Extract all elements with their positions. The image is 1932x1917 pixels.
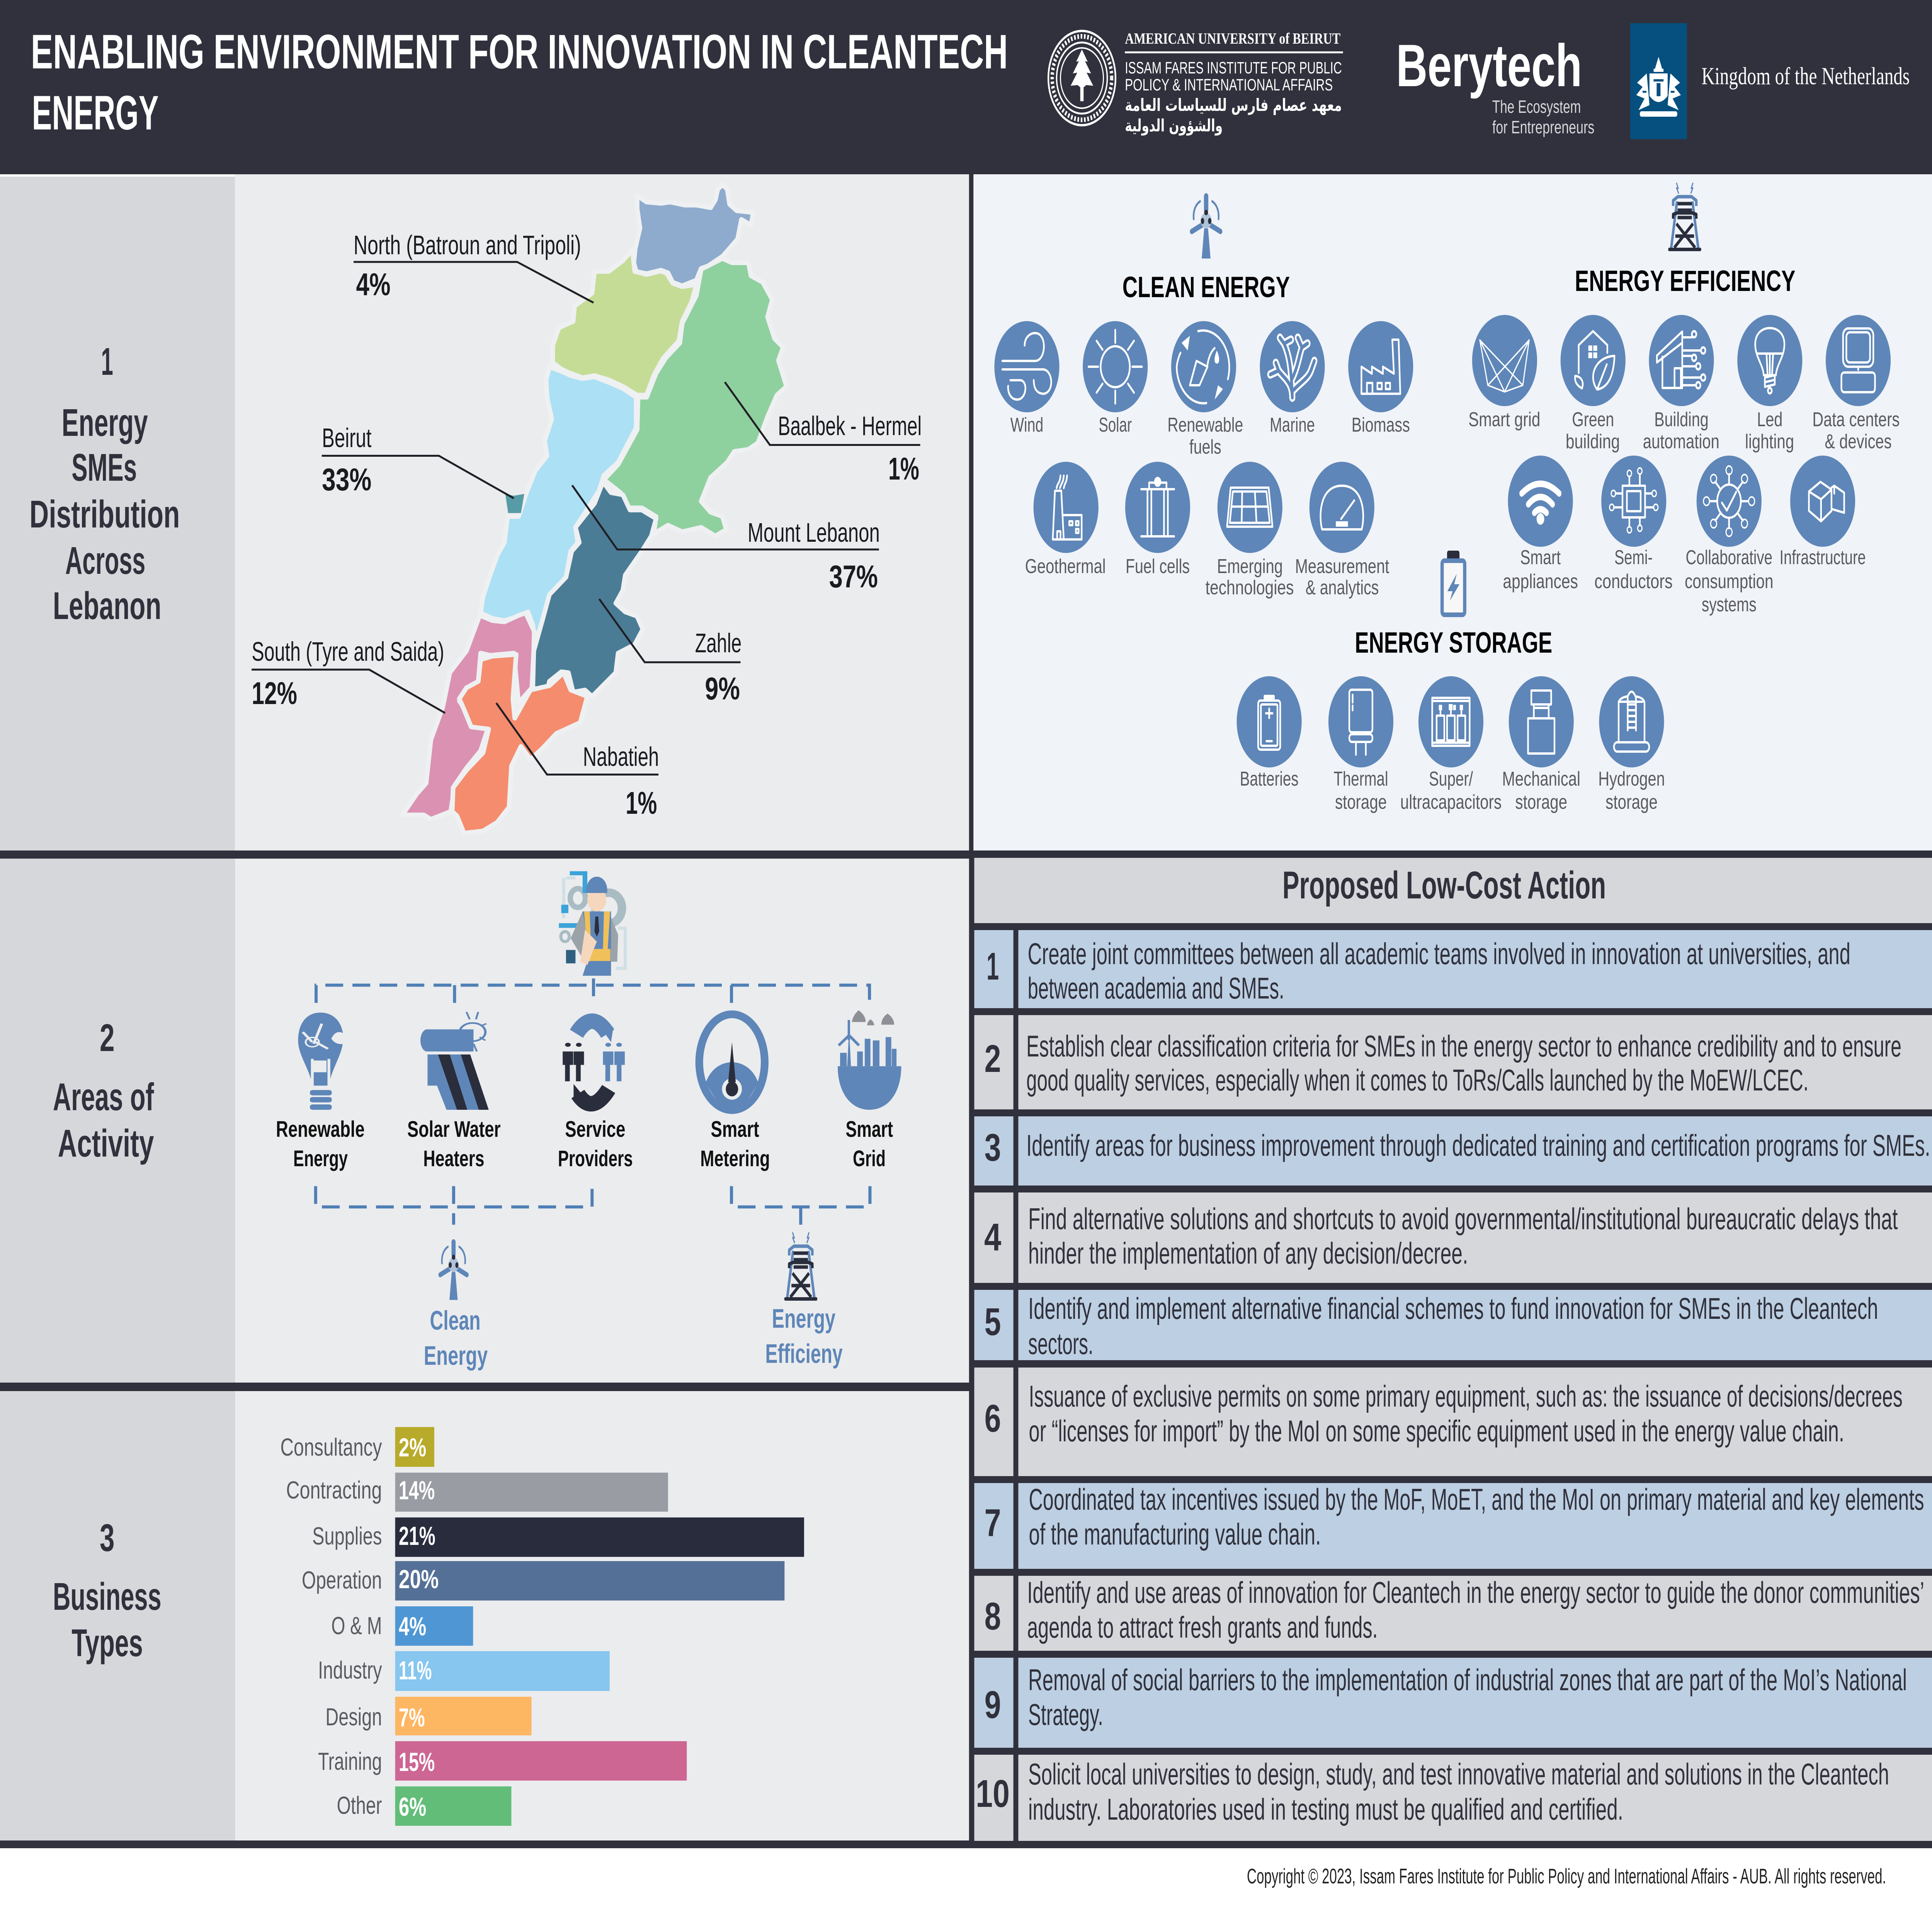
bar chart: O & M xyxy=(331,1612,382,1640)
panel: section 3 business types xyxy=(0,1391,969,1840)
heading: section 1 xyxy=(29,340,180,628)
activity labels: Solar Water xyxy=(407,1116,501,1142)
icon: wind: Wind xyxy=(1010,413,1043,436)
icon: building automation: automation xyxy=(1643,430,1719,453)
action 7: of the manufacturing value chain. xyxy=(1029,1517,1321,1551)
icon: smart appliances xyxy=(1503,456,1578,593)
map labels: 4% xyxy=(356,267,391,302)
icon: building automation xyxy=(1643,315,1719,453)
icon: green building: building xyxy=(1566,430,1620,453)
action 5: 5 xyxy=(985,1300,1001,1344)
action 5: Identify and implement alternative financial schemes to fund innovation for SMEs in the Cleantech xyxy=(1028,1292,1878,1325)
map labels: North (Batroun and Tripoli) xyxy=(354,230,581,260)
icon: thermal storage xyxy=(1328,676,1393,813)
bar chart: 11% xyxy=(399,1656,432,1685)
icon: emerging technologies: technologies xyxy=(1206,576,1294,599)
action 7: 7 xyxy=(985,1501,1001,1544)
icon: supercapacitors: Super/ xyxy=(1429,767,1473,790)
logo text: Issam Fares Institute: POLICY & INTERNATIONAL AFFAIRS xyxy=(1125,75,1333,94)
icon: data centers xyxy=(1812,315,1900,453)
label: energy efficiency xyxy=(765,1303,843,1369)
heading: section 1: Lebanon xyxy=(53,584,162,628)
action 8: Identify and use areas of innovation for Cleantech in the energy sector to guide the donor communities’ xyxy=(1027,1576,1924,1609)
label: clean energy: Clean xyxy=(430,1305,481,1335)
logo: Berytech: The Ecosystem xyxy=(1492,97,1581,117)
action 1: between academia and SMEs. xyxy=(1028,971,1284,1005)
activity labels: Renewable xyxy=(276,1116,365,1142)
map labels: 37% xyxy=(829,559,878,594)
icon: green building xyxy=(1561,315,1626,453)
icon: infrastructure: Infrastructure xyxy=(1780,546,1866,569)
icon: smart appliances: Smart xyxy=(1520,546,1561,569)
icon: batteries xyxy=(1237,676,1302,790)
icon: collaborative consumption: Collaborative xyxy=(1686,546,1772,569)
heading: section 3 xyxy=(53,1516,162,1665)
icon: battery xyxy=(1442,551,1465,615)
heading: section 2 xyxy=(53,1016,154,1165)
bar chart: Supplies xyxy=(312,1522,382,1550)
icon: marine xyxy=(1260,321,1325,436)
icon: mechanical storage xyxy=(1502,676,1580,813)
icon: supercapacitors: ultracapacitors xyxy=(1400,791,1502,813)
icon: supercapacitors xyxy=(1400,676,1502,813)
icon: smart meter xyxy=(699,1014,765,1110)
map labels: Zahle xyxy=(695,628,742,658)
icon: mechanical storage: Mechanical xyxy=(1502,767,1580,790)
logo: Berytech xyxy=(1396,32,1594,137)
bar chart: 20% xyxy=(399,1565,439,1594)
bar chart: Operation xyxy=(302,1566,382,1594)
icon: smart grid city xyxy=(838,1010,901,1110)
action 9: Strategy. xyxy=(1028,1698,1103,1732)
header band xyxy=(31,23,1910,139)
logo: Kingdom of the Netherlands xyxy=(1630,23,1910,139)
icon: thermal storage: storage xyxy=(1335,791,1387,813)
action 7: Coordinated tax incentives issued by the MoF, MoET, and the MoI on primary material and key elements xyxy=(1029,1483,1924,1516)
icon: clean energy turbine xyxy=(440,1239,467,1300)
icon: green building: Green xyxy=(1572,408,1614,431)
icon: renewable energy bulb xyxy=(298,1013,344,1110)
action 3: 3 xyxy=(985,1126,1001,1169)
bar chart: Industry xyxy=(318,1656,382,1684)
panel: proposed low-cost action table xyxy=(974,858,1932,1841)
action 10: Solicit local universities to design, study, and test innovative material and solutions in the Cleantech xyxy=(1028,1757,1889,1791)
activity labels: Energy xyxy=(293,1146,348,1171)
icon: service providers xyxy=(563,1021,625,1104)
heading: section 3: Business xyxy=(53,1575,162,1618)
icon: measurement and analytics: & analytics xyxy=(1306,576,1379,599)
action 3 xyxy=(974,1116,1932,1186)
action 10 xyxy=(974,1755,1932,1841)
heading: section 1: Energy xyxy=(62,401,148,444)
icon: semiconductors xyxy=(1594,456,1673,593)
action 9 xyxy=(974,1658,1932,1748)
icon: marine: Marine xyxy=(1270,413,1315,436)
action 1: Create joint committees between all academic teams involved in innovation at universities, and xyxy=(1028,937,1850,971)
icon: measurement and analytics: Measurement xyxy=(1295,555,1389,578)
heading: section 1: SMEs xyxy=(71,446,137,489)
action 2 xyxy=(974,1015,1932,1109)
icon: renewable fuels xyxy=(1167,321,1243,458)
icon: measurement and analytics xyxy=(1295,462,1389,599)
action 1: 1 xyxy=(986,945,999,988)
heading: section 1: Distribution xyxy=(29,493,180,536)
activity labels: Metering xyxy=(700,1146,770,1171)
activity labels xyxy=(276,1116,893,1171)
title: ENABLING ENVIRONMENT FOR INNOVATION IN CLEANTECH xyxy=(31,25,1008,78)
logo text: Issam Fares Institute: ISSAM FARES INSTITUTE FOR PUBLIC xyxy=(1125,58,1342,77)
label: energy efficiency: Energy xyxy=(772,1303,835,1334)
icon: emerging technologies xyxy=(1206,462,1294,599)
action 6: or “licenses for import” by the MoI on some specific equipment used in the energy value chain. xyxy=(1029,1414,1844,1448)
icon: semiconductors: Semi- xyxy=(1614,546,1653,569)
activity labels: Grid xyxy=(853,1146,886,1171)
icon: collaborative consumption: consumption xyxy=(1685,570,1774,593)
bar chart: 4% xyxy=(399,1612,426,1641)
icon: data centers: Data centers xyxy=(1812,408,1900,431)
heading: section 2: Areas of xyxy=(53,1075,154,1119)
logo: AUB emblem xyxy=(1048,31,1116,125)
icon: hydrogen storage: Hydrogen xyxy=(1598,767,1665,790)
heading: energy efficiency: ENERGY EFFICIENCY xyxy=(1575,264,1796,297)
icon: wind xyxy=(994,321,1060,436)
icon: geothermal: Geothermal xyxy=(1025,555,1106,578)
map labels: 1% xyxy=(626,786,657,821)
connector lines xyxy=(316,978,870,1225)
bar chart: 15% xyxy=(399,1747,435,1777)
icon: hydrogen storage: storage xyxy=(1605,791,1658,813)
icon: collaborative consumption: systems xyxy=(1702,593,1757,616)
map labels: Mount Lebanon xyxy=(748,517,880,548)
bar chart: 7% xyxy=(399,1703,425,1732)
heading: energy storage: ENERGY STORAGE xyxy=(1355,626,1552,659)
action 10: 10 xyxy=(976,1772,1010,1815)
icon: engineer xyxy=(559,871,625,976)
icon: smart appliances: appliances xyxy=(1503,570,1578,593)
activity labels: Service xyxy=(565,1116,625,1142)
icon: hydrogen storage xyxy=(1598,676,1665,813)
bar chart: Training xyxy=(318,1747,382,1775)
map labels: 33% xyxy=(322,462,371,497)
bar chart: 2% xyxy=(399,1433,426,1462)
action 1 xyxy=(974,930,1932,1008)
heading: clean energy: CLEAN ENERGY xyxy=(1122,270,1290,303)
logo: Berytech: Berytech xyxy=(1396,32,1582,99)
activity labels: Providers xyxy=(558,1146,633,1171)
icon: geothermal xyxy=(1025,462,1106,578)
map labels: Nabatieh xyxy=(583,742,659,772)
action 9: 9 xyxy=(985,1683,1001,1726)
icon: batteries: Batteries xyxy=(1240,767,1299,790)
action 4 xyxy=(974,1192,1932,1283)
logo text: Issam Fares Institute: والشؤون الدولية xyxy=(1125,116,1223,136)
map labels: 9% xyxy=(705,671,740,706)
table heading xyxy=(974,858,1932,923)
map labels: Beirut xyxy=(322,423,371,453)
action 4: 4 xyxy=(984,1216,1001,1259)
diagram icons xyxy=(298,871,901,1225)
icon: smart grid: Smart grid xyxy=(1468,408,1540,431)
icon: wind turbine xyxy=(1192,193,1220,259)
map labels: South (Tyre and Saida) xyxy=(252,636,444,667)
label: clean energy xyxy=(424,1305,488,1371)
icon: biomass: Biomass xyxy=(1352,413,1410,436)
icon: LED lighting xyxy=(1737,315,1802,453)
icon: collaborative consumption xyxy=(1685,456,1774,616)
icon: renewable fuels: Renewable xyxy=(1167,413,1243,436)
heading: section 1: 1 xyxy=(101,340,113,383)
heading: section 2: Activity xyxy=(58,1122,154,1165)
activity labels: Heaters xyxy=(423,1146,485,1171)
action 2: Establish clear classification criteria for SMEs in the energy sector to enhance credibility and to ensure xyxy=(1026,1029,1901,1063)
logo text: Issam Fares Institute xyxy=(1125,30,1343,136)
action 10: industry. Laboratories used in testing must be qualified and certified. xyxy=(1028,1793,1623,1826)
action 4: hinder the implementation of any decision/decree. xyxy=(1028,1237,1468,1270)
icon: data centers: & devices xyxy=(1825,430,1892,453)
icon: solar: Solar xyxy=(1099,413,1132,436)
icon: renewable fuels: fuels xyxy=(1189,435,1221,458)
panel: technology categories xyxy=(973,174,1932,850)
icon: emerging technologies: Emerging xyxy=(1217,555,1283,578)
action 3: Identify areas for business improvement through dedicated training and certification programs for SMEs. xyxy=(1026,1129,1930,1162)
label: clean energy: Energy xyxy=(424,1340,488,1371)
bar chart: Design xyxy=(325,1703,382,1731)
activity labels: Smart xyxy=(846,1116,893,1142)
bar chart: Consultancy xyxy=(280,1433,382,1461)
activity labels: Smart xyxy=(711,1116,759,1142)
copyright footer: Copyright © 2023, Issam Fares Institute for Public Policy and International Affairs - AUB. All rights reserved. xyxy=(1247,1864,1886,1888)
logo text: Issam Fares Institute: معهد عصام فارس للسياسات العامة xyxy=(1125,96,1342,116)
logo: Berytech: for Entrepreneurs xyxy=(1492,118,1594,137)
title: ENERGY xyxy=(32,86,158,139)
icon: transmission tower xyxy=(1668,183,1701,251)
icon: mechanical storage: storage xyxy=(1515,791,1567,813)
action 5 xyxy=(974,1290,1932,1361)
logo text: Issam Fares Institute: AMERICAN UNIVERSITY of BEIRUT xyxy=(1125,30,1340,47)
icon: building automation: Building xyxy=(1654,408,1709,431)
bar chart: 21% xyxy=(399,1521,435,1551)
map labels: 1% xyxy=(888,451,919,486)
icon: solar xyxy=(1083,321,1148,436)
heading: section 1: Across xyxy=(65,539,145,582)
icon: energy efficiency tower xyxy=(784,1232,817,1301)
icon: solar water heater xyxy=(420,1012,489,1110)
table heading: Proposed Low-Cost Action xyxy=(1282,864,1606,907)
panel: section 2 areas of activity xyxy=(0,859,969,1383)
map labels: 12% xyxy=(252,676,297,711)
icon: fuel cells xyxy=(1125,462,1190,578)
icon: smart grid xyxy=(1468,315,1540,431)
map of Lebanon xyxy=(252,185,920,833)
bar chart xyxy=(280,1427,804,1826)
icon: biomass xyxy=(1348,321,1413,436)
icon: fuel cells: Fuel cells xyxy=(1126,555,1190,578)
heading: section 3: 3 xyxy=(100,1516,114,1560)
bar chart: 6% xyxy=(399,1792,426,1822)
action 6: 6 xyxy=(985,1397,1001,1440)
action 7 xyxy=(974,1483,1932,1569)
heading: section 2: 2 xyxy=(100,1016,114,1060)
panel: section 1 SMEs distribution xyxy=(0,174,969,850)
action 8: agenda to attract fresh grants and funds. xyxy=(1027,1611,1378,1644)
bar chart: Contracting xyxy=(286,1476,382,1504)
action 2: 2 xyxy=(985,1037,1001,1080)
bar chart: 14% xyxy=(399,1476,435,1505)
action 8 xyxy=(974,1576,1932,1651)
map labels: Baalbek - Hermel xyxy=(778,411,922,441)
action 6: Issuance of exclusive permits on some primary equipment, such as: the issuance of decisions/decrees xyxy=(1029,1379,1903,1413)
map labels xyxy=(252,230,922,821)
logo: Kingdom of the Netherlands: Kingdom of the Netherlands xyxy=(1702,63,1910,90)
icon: thermal storage: Thermal xyxy=(1333,767,1388,790)
action 2: good quality services, especially when it comes to ToRs/Calls launched by the MoEW/LCEC. xyxy=(1026,1063,1809,1097)
icon: LED lighting: Led xyxy=(1757,408,1782,431)
action 6 xyxy=(974,1368,1932,1476)
title xyxy=(31,25,1008,139)
action 9: Removal of social barriers to the implementation of industrial zones that are part of the MoI’s National xyxy=(1028,1663,1907,1697)
icon: semiconductors: conductors xyxy=(1594,570,1673,593)
bar chart: Other xyxy=(337,1791,382,1819)
action 8: 8 xyxy=(985,1595,1001,1638)
heading: section 3: Types xyxy=(71,1621,143,1665)
action 4: Find alternative solutions and shortcuts to avoid governmental/institutional bureaucratic delays that xyxy=(1028,1202,1898,1236)
label: energy efficiency: Efficieny xyxy=(765,1339,843,1369)
icon: LED lighting: lighting xyxy=(1745,430,1794,453)
action 5: sectors. xyxy=(1028,1327,1093,1361)
icon: infrastructure xyxy=(1780,456,1866,569)
